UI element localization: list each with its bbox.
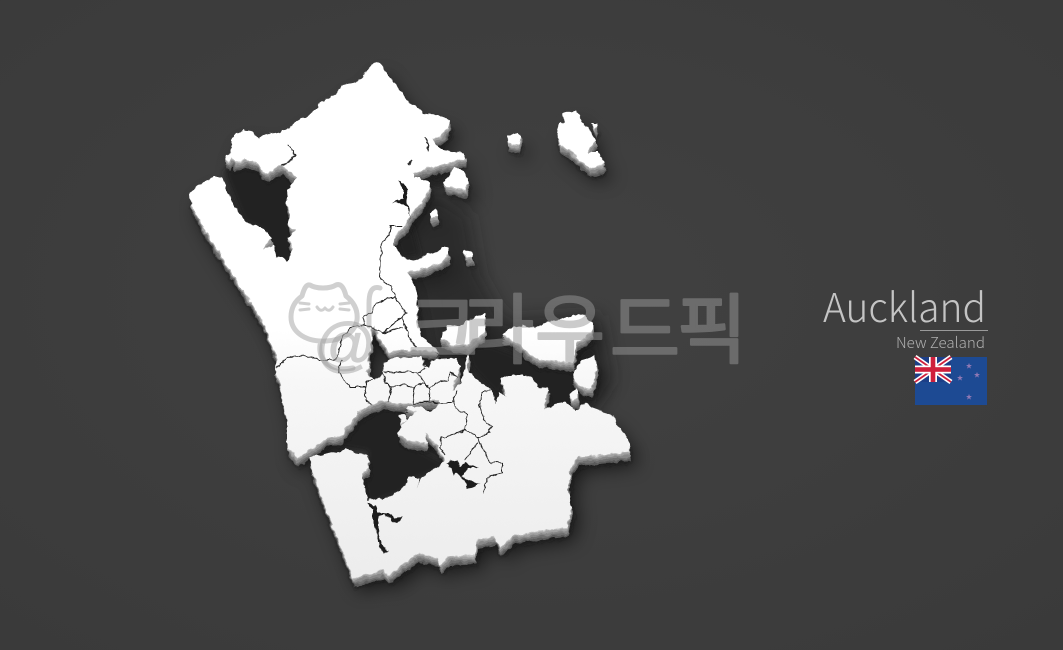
title: Auckland	[823, 276, 986, 334]
inlets and dark creeks	[366, 180, 480, 553]
subtitle: New Zealand	[896, 332, 985, 353]
extruded land	[190, 61, 632, 588]
gulf shadow	[398, 190, 612, 410]
flag: New Zealand	[915, 357, 987, 405]
watermark: brand text: 크라우드픽	[408, 289, 747, 374]
title block	[823, 276, 988, 353]
dark harbours	[224, 166, 598, 504]
flag stars: Southern Cross	[957, 363, 980, 400]
map top surface	[190, 61, 630, 578]
title divider	[920, 330, 988, 331]
extruded map walls	[190, 62, 632, 588]
flag canton: Union Jack	[915, 357, 951, 382]
watermark: at sign: @	[315, 311, 376, 378]
local board boundary lines	[277, 226, 502, 493]
thin creek lines	[282, 137, 428, 165]
map shadow	[197, 75, 637, 592]
watermark	[291, 285, 747, 378]
map: Auckland region	[190, 61, 637, 592]
watermark: cat logo	[291, 285, 380, 369]
